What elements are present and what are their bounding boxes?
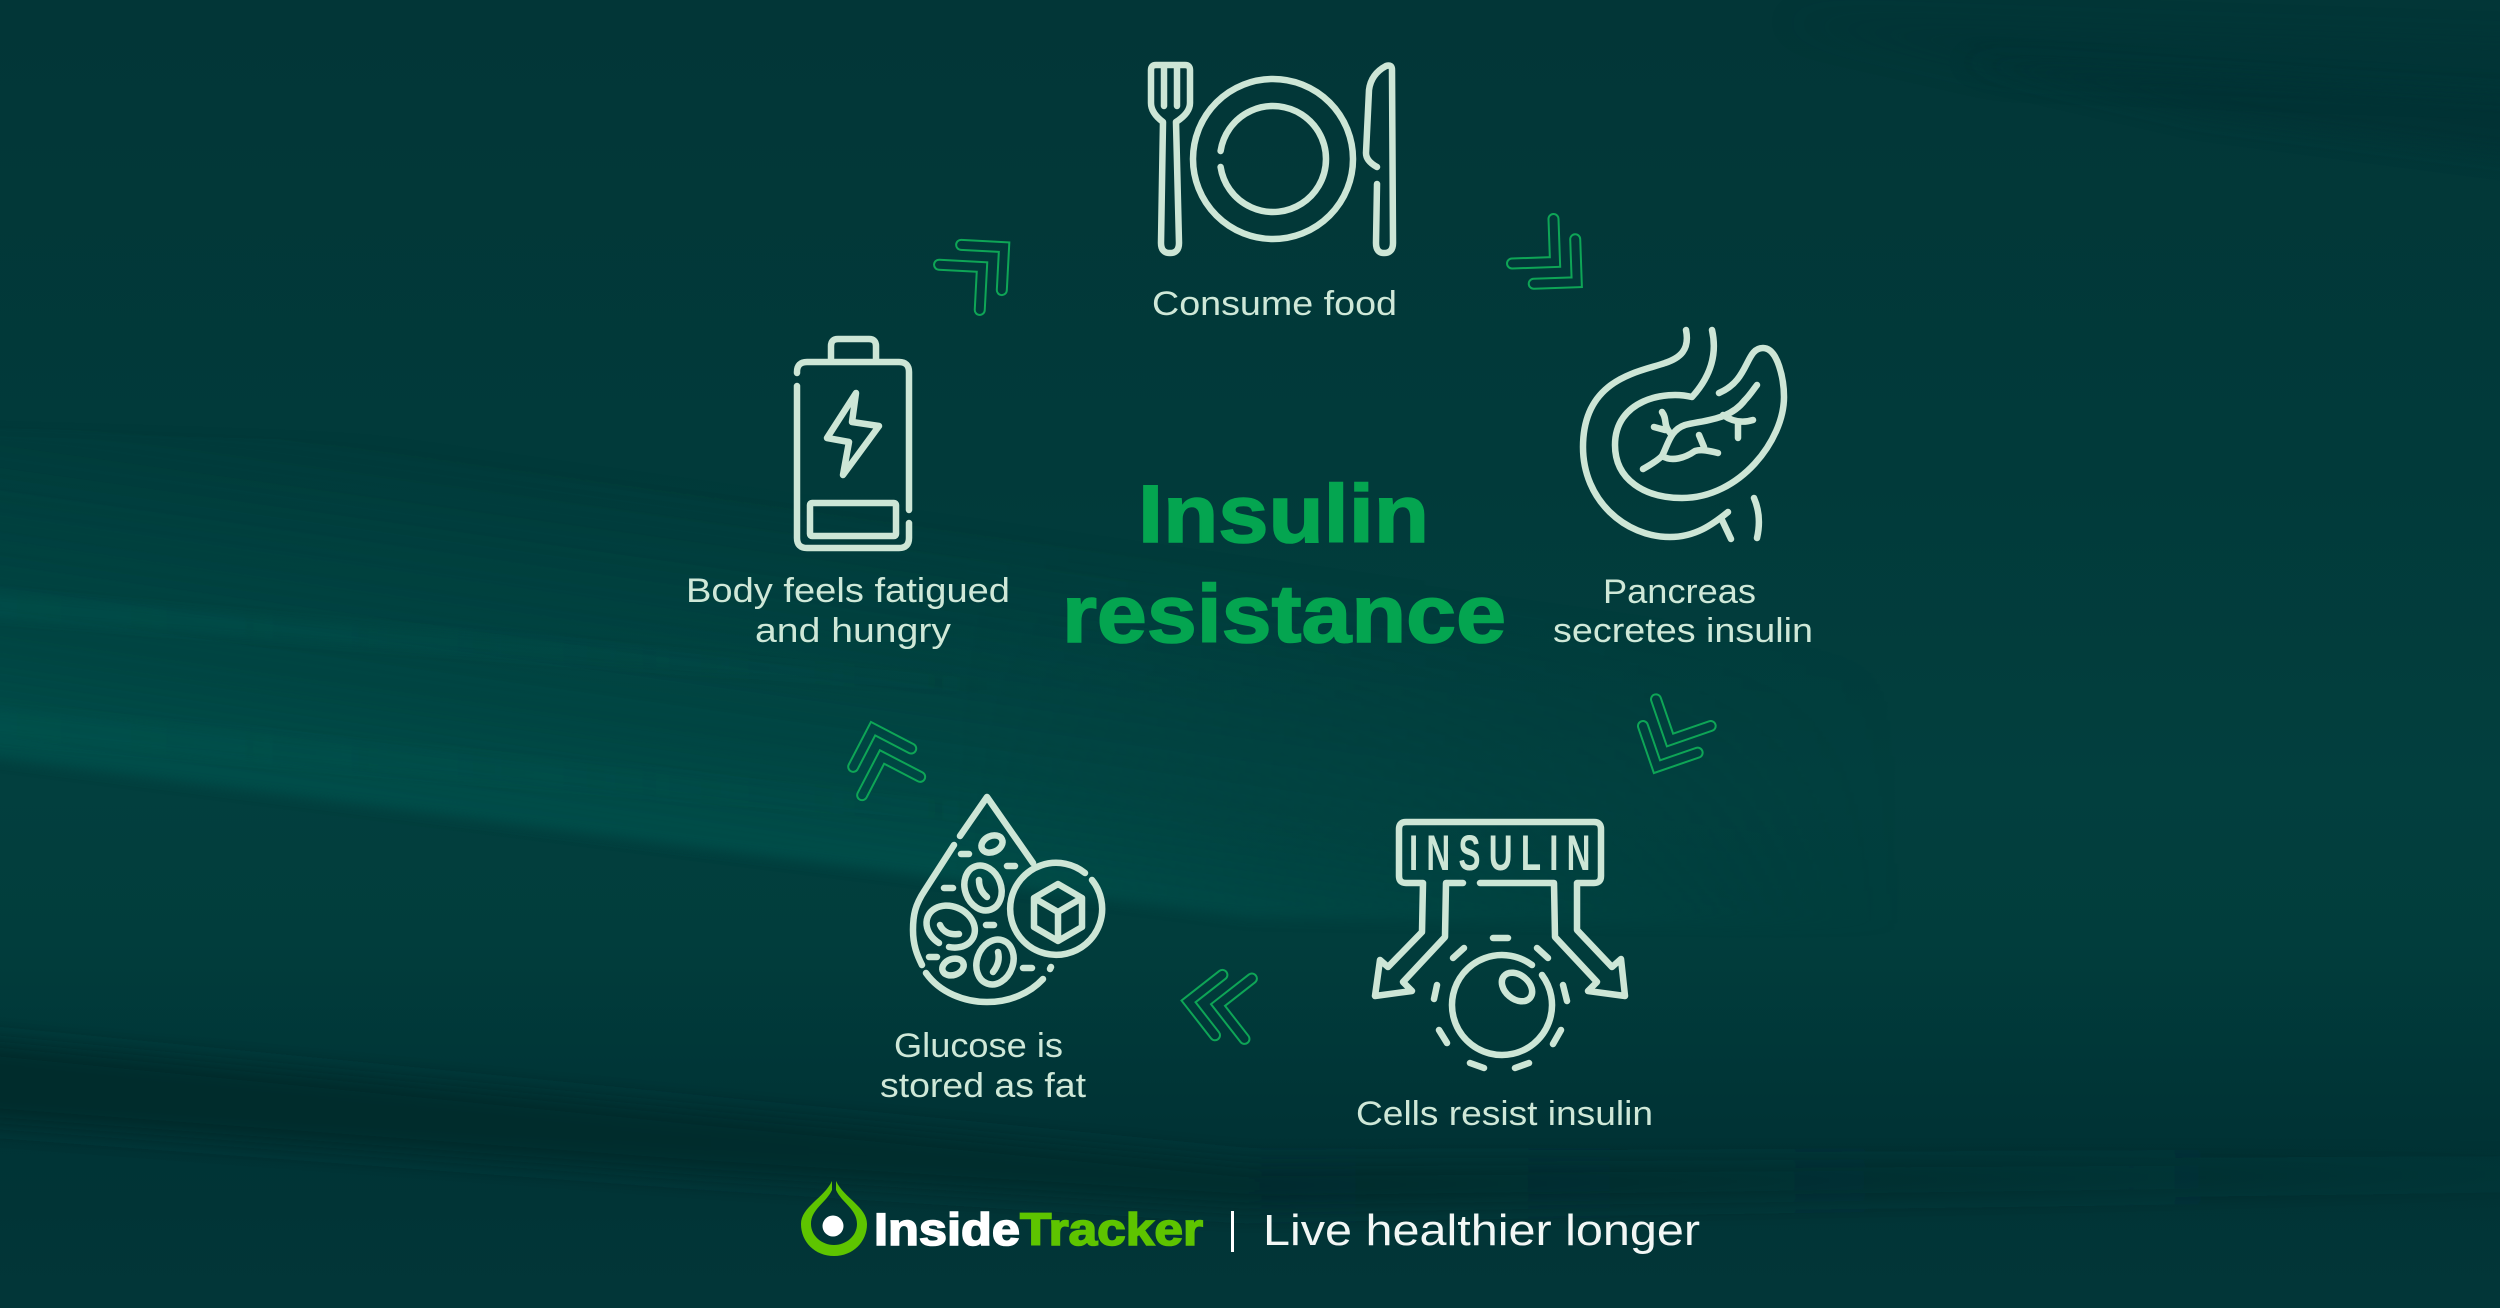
- title: [1062, 469, 1506, 660]
- label: glucose is stored as fat: stored as fat: [880, 1067, 1087, 1105]
- label: pancreas secretes insulin: secretes insulin: [1553, 612, 1813, 650]
- step: glucose stored as fat: [880, 797, 1102, 1105]
- arrow: pancreas to cells: [1637, 693, 1717, 774]
- label: pancreas secretes insulin: Pancreas: [1603, 573, 1756, 611]
- icon: InsideTracker drop logo: [801, 1181, 867, 1256]
- step: pancreas secretes insulin: [1553, 330, 1813, 650]
- label: body feels fatigued and hungry: and hungry: [755, 612, 951, 650]
- wordmark: Inside: [874, 1204, 1020, 1255]
- label: consume food: Consume food: [1152, 285, 1397, 323]
- wordmark: Tracker: [1020, 1204, 1203, 1255]
- label: cells resist insulin: Cells resist insulin: [1356, 1095, 1653, 1133]
- icon: blood drop with sugar cube: [913, 797, 1102, 1002]
- step: consume food: [1151, 65, 1397, 323]
- arrow: food to pancreas: [1506, 213, 1583, 290]
- separator: [1231, 1211, 1234, 1252]
- footer: logo and tagline: [801, 1181, 1700, 1256]
- icon: insulin sign and cell: INSULIN: [1409, 825, 1591, 881]
- icon: insulin sign and cell: [1375, 822, 1625, 1068]
- title: Insulin: [1138, 469, 1429, 560]
- label: glucose is stored as fat: Glucose is: [894, 1027, 1063, 1065]
- arrow: glucose to fatigue: [847, 720, 926, 802]
- tagline: Live healthier longer: [1263, 1206, 1700, 1255]
- label: pancreas secretes insulin: [1553, 573, 1813, 650]
- label: glucose is stored as fat: [880, 1027, 1087, 1105]
- title: resistance: [1062, 569, 1506, 660]
- label: body feels fatigued and hungry: Body feels fatigued: [686, 572, 1010, 610]
- arrow: fatigue to food: [933, 238, 1010, 316]
- icon: low battery: [797, 339, 909, 548]
- step: cells resist insulin: [1356, 822, 1653, 1133]
- background: [0, 515, 2418, 1223]
- arrow: cells to glucose: [1180, 968, 1258, 1045]
- icon: pancreas: [1583, 330, 1784, 539]
- icon: fork, plate and knife: [1151, 65, 1393, 253]
- label: body feels fatigued and hungry: [686, 572, 1010, 650]
- step: body feels fatigued and hungry: [686, 339, 1010, 650]
